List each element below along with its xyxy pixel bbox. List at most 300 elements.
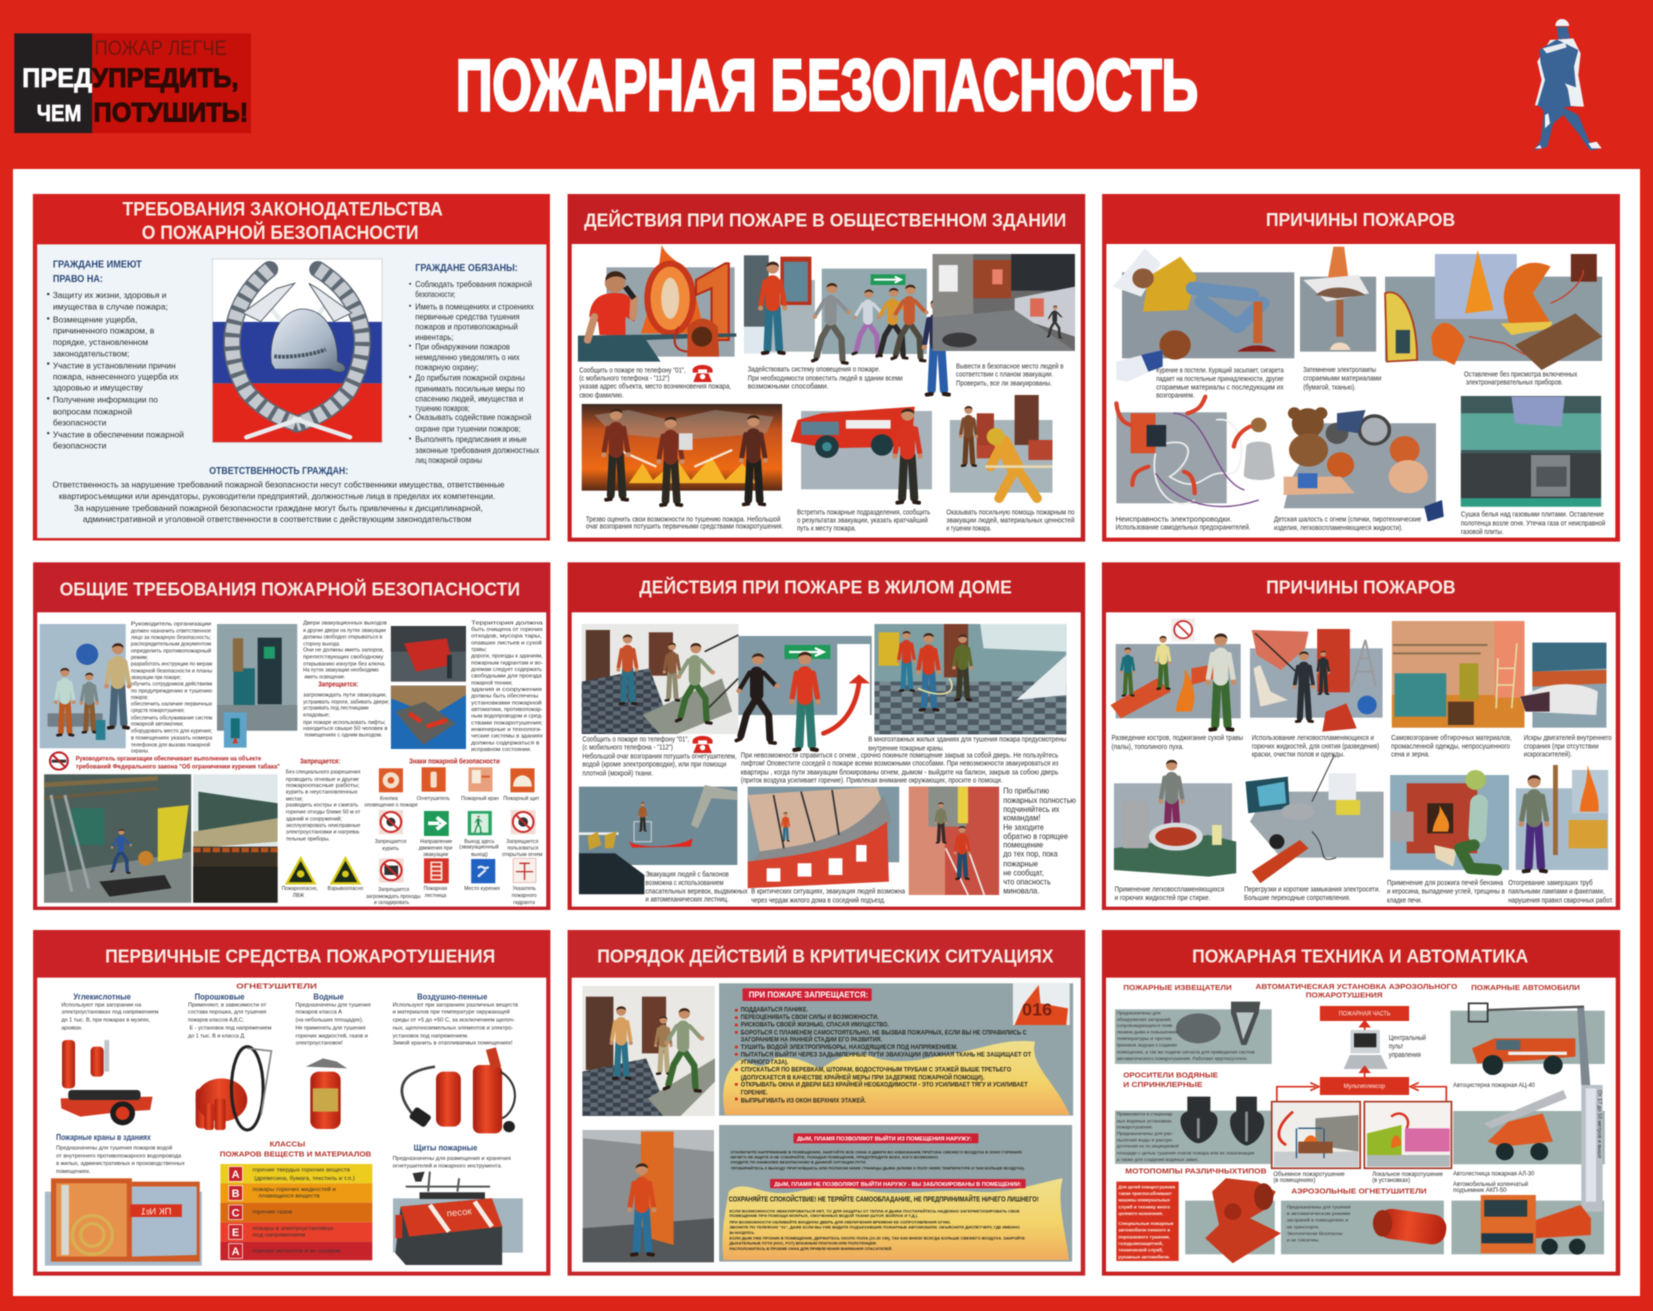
fire classes table: плавящихся веществ [259, 1194, 320, 1200]
rights heading [53, 260, 142, 285]
panel body [572, 978, 1081, 1272]
motor pump text box: газодымозащитной, [1118, 1240, 1163, 1247]
text column: пожароопасные работы; [286, 783, 360, 789]
caption: нарушения правил сварочных работ. [1508, 896, 1613, 904]
rights list: порядке, установленном [53, 337, 148, 347]
caption: Сообщить о пожаре по телефону "01", [582, 736, 689, 744]
fire classes table: Е [232, 1227, 239, 1239]
rights list [47, 290, 184, 450]
sign captions: Пожарный щит [503, 795, 540, 802]
sign captions: оповещения о пожаре [364, 803, 418, 809]
vehicle captions [1453, 1082, 1535, 1194]
caption: Проверить, все ли эвакуированы. [956, 379, 1052, 387]
illustration: washing with fuel [1114, 760, 1236, 877]
instructions: blocked in room: ЗВОНИТЕ ПО ТЕЛЕФОНУ "01", ДАЖЕ ЕСЛИ ВЫ УЖЕ ВИДИТЕ ПОДЪЕХАВШИЕ ПОЖАРНЫЕ АВТОМОБИЛИ. ОБЪЯСНИТЕ ДИСПЕТЧЕРУ, ГДЕ ИМЕННО [729, 1225, 1020, 1229]
caption: паяльными лампами и факелами, [1508, 887, 1605, 895]
sprinklers block [1115, 1097, 1272, 1164]
text column: курить в неустановленных [286, 790, 358, 796]
text column: пожарным гидрантам и во- [471, 660, 543, 666]
forbidden list: (ДОПУСКАЕТСЯ В КАЧЕСТВЕ КРАЙНЕЙ МЕРЫ ПРИ ЗАДЕРЖКЕ ПОЖАРНОЙ ПОМОЩИ). [741, 1072, 984, 1081]
responsibility text: квартиросъемщики или арендаторы, руководители предприятий, должностные лица в пределах их компетенции. [59, 491, 495, 501]
forbidden list: ОТКРЫВАТЬ ОКНА И ДВЕРИ БЕЗ КРАЙНЕЙ НЕОБХОДИМОСТИ - ЭТО УСИЛИВАЕТ ТЯГУ И УСИЛИВАЕТ [741, 1080, 1028, 1089]
caption [1508, 879, 1613, 904]
sprinklers text: ных водяных установках [1117, 1119, 1172, 1124]
detectors text: обнаружения загораний, [1117, 1016, 1172, 1023]
caption: Применение для розжига печей бензина [1387, 879, 1503, 887]
caption: о результатах эвакуации, указать кратчайший [797, 517, 928, 525]
panel body [1106, 244, 1615, 538]
duties list: инвентарь; [415, 332, 454, 342]
sign captions: гидранта [513, 900, 536, 906]
subheading: extinguishers: ОГНЕТУШИТЕЛИ [236, 982, 317, 990]
advisory text: что опасность [1003, 878, 1051, 887]
sign captions: открытым огнем [502, 852, 542, 858]
panel frame [33, 562, 550, 910]
advisory text: пожарные [1003, 860, 1038, 869]
photo: blocked exit [217, 624, 297, 748]
text column [131, 622, 213, 755]
text: CO2 [61, 1002, 158, 1032]
sprinklers text: Предназначены для рас- [1117, 1131, 1174, 1137]
rights list: пожара, нанесенного ущерба их [53, 372, 179, 382]
text column: здания и сооружения [471, 687, 542, 693]
sign captions: Пожарная [424, 886, 447, 892]
illustration: balcony rescue [579, 785, 737, 894]
section headings: ОРОСИТЕЛИ ВОДЯНЫЕ [1123, 1072, 1218, 1080]
illustration: fire truck meeting [791, 407, 932, 503]
fire shield with sand box: песок [446, 1206, 473, 1220]
text column: Руководитель организации [131, 622, 211, 628]
heading: ПРИЧИНЫ ПОЖАРОВ [1266, 578, 1456, 598]
caption: Небольшой очаг возгорания потушить огнетушителем, [582, 752, 737, 760]
text column: установками пожарной [471, 699, 542, 706]
aerosol text: Предназначены для тушения [1287, 1204, 1351, 1210]
forbidden list: РИСКОВАТЬ СВОЕЙ ЖИЗНЬЮ, СПАСАЯ ИМУЩЕСТВО. [741, 1019, 889, 1028]
caption: и автомеханических лестниц. [645, 896, 729, 904]
caption: через чердак жилого дома в соседний подъезд. [751, 897, 885, 905]
aerosol text: загораний в помещениях и [1287, 1217, 1348, 1224]
duties heading: ГРАЖДАНЕ ОБЯЗАНЫ: [415, 263, 518, 274]
caption: горючих жидкостей, для снятия (разведения) [1252, 742, 1379, 750]
motor pump text box: автомобили пенного и [1118, 1227, 1170, 1234]
text column: зданий и сооружений; [286, 815, 342, 822]
detectors text: признаков, ведущих к созданию [1117, 1044, 1177, 1049]
text column: лицо за пожарную безопасность; [131, 635, 211, 641]
captions: Локальное пожаротушение [1372, 1171, 1443, 1178]
duties list: Соблюдать требования пожарной [415, 279, 532, 289]
panel frame [568, 194, 1085, 542]
sign captions: Указатель [512, 886, 536, 892]
sign captions: Место курения [464, 886, 500, 892]
text: water: (на небольших площадях). [296, 1018, 364, 1024]
rights list: Возмещение ущерба, [53, 315, 137, 325]
text column: устраивать под лестницами [303, 706, 369, 712]
caption: сена и зерна. [1391, 751, 1430, 759]
sign captions: пользоваться [507, 846, 538, 852]
illustration: closing door [736, 636, 872, 750]
fire classes heading: ПОЖАРОВ ВЕЩЕСТВ И МАТЕРИАЛОВ [220, 1151, 371, 1159]
duties list: безопасности; [415, 289, 455, 299]
caption: Трезво оценить свои возможности по тушению пожара. Небольшой [586, 515, 780, 523]
caption: В критических ситуациях, эвакуация людей возможна [751, 887, 905, 895]
illustration: corridor plan [933, 254, 1075, 351]
rights list: безопасности [53, 441, 107, 450]
sign captions: лестница [425, 893, 447, 899]
text column: находиться свыше 50 человек в [303, 726, 387, 732]
sign captions: пожарного [512, 893, 537, 899]
forbidden list: СПУСКАТЬСЯ ПО ВЕРЕВКАМ, ШТОРАМ, ВОДОСТОЧНЫМ ТРУБАМ С ЭТАЖЕЙ ВЫШЕ ТРЕТЬЕГО [741, 1065, 1011, 1074]
text column: эксплуатировать неисправные [286, 823, 360, 829]
duties list: До прибытия пожарной охраны [415, 373, 525, 383]
fire station box: ПОЖАРНАЯ ЧАСТЬ [1339, 1011, 1391, 1018]
text column: в помещениях указать номера [131, 735, 213, 741]
text column: по предупреждению и тушению [131, 688, 213, 694]
caption: Искры двигателей внутреннего [1524, 734, 1612, 742]
advisory text: до тех пор, пока [1003, 850, 1058, 859]
caption: Сообщить о пожаре по телефону "01", [579, 367, 686, 375]
text: foam: Используют при загораниях различных веществ [393, 1002, 518, 1008]
illustration: volumetric extinguishing [1272, 1102, 1360, 1168]
icon: no smoking [50, 752, 68, 770]
aerosol text: на транспорте. [1287, 1225, 1320, 1230]
duties list: лиц пожарной охраны [415, 455, 482, 465]
caption: Применение легковоспламеняющихся [1115, 886, 1224, 894]
caption: (с мобильного телефона - "112") [579, 375, 670, 383]
fire classes table: В [232, 1188, 240, 1200]
sign captions: выход) [471, 852, 488, 858]
text column: разводить костры и сжигать [286, 803, 358, 809]
illustration: lamp [1300, 247, 1376, 352]
panel: general requirements [33, 562, 550, 910]
text: foam: и материалов при температуре окружающей [393, 1009, 510, 1016]
caption: сгораемыми материалами [1303, 374, 1381, 382]
multiplexer box [1320, 1077, 1409, 1095]
tobacco law note: Руководитель организации обеспечивает выполнение на объекте [76, 755, 261, 763]
text column: эвакуации при пожаре; [131, 675, 182, 681]
text column: определить противопожарный [131, 647, 211, 654]
aerosol text: Экологически безопасны [1287, 1231, 1343, 1237]
icon: arrow up [1360, 1021, 1369, 1030]
responsibility text [52, 480, 505, 524]
caption [748, 365, 903, 390]
extinguisher type headings: Воздушно-пенные [417, 993, 488, 1002]
text column: электроустановки и нагрева- [286, 830, 360, 836]
text: water: пожаров класса А [296, 1010, 342, 1016]
hydrants text: помещениях. [56, 1169, 91, 1175]
text column: загромождать пути эвакуации, [303, 693, 387, 699]
caption: (бумагой, тканью). [1303, 383, 1356, 391]
aerosol text: и не токсичны. [1287, 1239, 1320, 1244]
panel body [572, 244, 1081, 538]
caption: Отогревание замерзших труб [1508, 879, 1593, 887]
caption: Детская шалость с огнем (спички, пиротехнические [1274, 515, 1421, 524]
sign captions: Запрещается [378, 887, 409, 893]
vehicle captions: Автомобильный коленчатый [1453, 1181, 1528, 1188]
instructions: way out is possible: НИЧЕГО НЕ ИЩИТЕ И НЕ СОБИРАЙТЕ; ПОКИДАЯ ПОМЕЩЕНИЕ, ПРЕДУПРЕДИТЕ ВСЕХ, КОГО ВОЗМОЖНО. [730, 1155, 939, 1159]
panel frame [568, 930, 1085, 1276]
instructions: blocked in room: ЕСЛИ ДЫМ УЖЕ ПРОНИК В ПОМЕЩЕНИЕ, ДЕРЖИТЕСЬ ОКОЛО ПОЛА (10-20 СМ), ТАК КАК ВНИЗУ ВСЕГДА БОЛЬШЕ СВЕЖЕГО ВОЗДУХА. ЗАКРОЙТЕ [729, 1236, 1025, 1240]
section headings: ПОЖАРОТУШЕНИЯ [1306, 992, 1383, 1000]
illustration: thawing pipes [1516, 765, 1608, 871]
sign captions: Кнопка [380, 796, 399, 802]
fire classes table: (древесина, бумага, текстиль и т.п.) [254, 1176, 355, 1182]
text column: доемам следует содержать [471, 667, 542, 673]
panel: actions in a public building [568, 194, 1085, 542]
text column: На путях эвакуации необходимо [303, 668, 379, 674]
panel body [1106, 612, 1616, 907]
hydrants text: от внутреннего противопожарного водопровода [56, 1154, 182, 1160]
text column: обеспечить наличие первичных [131, 701, 212, 707]
forbidden list: ПОДДАВАТЬСЯ ПАНИКЕ. [741, 1007, 808, 1014]
illustration: local extinguishing [1364, 1102, 1451, 1168]
caption: возможна с использованием [645, 879, 724, 887]
text column: проводить огневые и другие [286, 777, 359, 783]
rights list: Защиту их жизни, здоровья и [53, 290, 167, 300]
responsibility text: За нарушение требований пожарной безопасности граждане могут быть привлечены к дисциплинарной, [74, 503, 483, 513]
fire classes table: пожары в электроустановках [252, 1226, 334, 1232]
forbidden list [735, 1007, 1032, 1104]
caption [579, 367, 731, 399]
text column: кладовые; [303, 712, 330, 718]
motor pump text box: служб и технику иного [1118, 1203, 1170, 1210]
text column: быть очищена от горючих [471, 627, 543, 633]
text column: местах; [286, 797, 303, 803]
sprinklers text: Применяются в стационар- [1117, 1112, 1174, 1118]
illustration: hallway escape [582, 624, 738, 734]
text: water: электроустановок! [296, 1040, 343, 1046]
caption [1387, 879, 1505, 904]
illustration: garage room [1392, 621, 1524, 728]
caption: сгорания (при отсутствии [1524, 742, 1599, 750]
caption: Перегрузки и короткие замыкания электросети. [1244, 886, 1380, 894]
heading: ДЕЙСТВИЯ ПРИ ПОЖАРЕ В ОБЩЕСТВЕННОМ ЗДАНИИ [584, 210, 1066, 232]
detectors text: лением дыма и повышением [1117, 1030, 1178, 1035]
caption: падает на постельные принадлежности, другие [1156, 374, 1284, 383]
caption: Курение в постели. Курящий засыпает, сигарета [1156, 366, 1284, 375]
duties list [409, 279, 540, 465]
caption [1524, 734, 1612, 759]
duties list: охране при тушении пожаров; [415, 423, 521, 433]
illustration: assessing the fire [582, 404, 782, 505]
smoke instructions panel: ДЫМ, ПЛАМЯ ПОЗВОЛЯЮТ ВЫЙТИ ИЗ ПОМЕЩЕНИЯ НАРУЖУ: [797, 1134, 972, 1142]
caption [1116, 515, 1251, 531]
caption [1244, 886, 1380, 902]
panel body [37, 244, 546, 538]
icon: red telephone [693, 365, 713, 382]
text: powder: до 1 тыс. В и класса Д. [188, 1033, 246, 1039]
text column: распорядительным документом [131, 642, 211, 648]
text: foam: ных, щелочноземельных элементов и электро- [393, 1026, 513, 1032]
text column: опавших листьев и сухой [471, 639, 542, 646]
forbidden list: ВЫПРЫГИВАТЬ ИЗ ОКОН ВЕРХНИХ ЭТАЖЕЙ. [741, 1095, 866, 1104]
heading: ПРИЧИНЫ ПОЖАРОВ [1266, 211, 1455, 231]
caption: Эвакуация людей с балконов [645, 871, 729, 879]
sign captions: Пожароопасно, [282, 886, 318, 892]
advisory text: командам! [1003, 814, 1040, 823]
rights heading: ГРАЖДАНЕ ИМЕЮТ [53, 260, 142, 271]
caption [868, 736, 1066, 752]
tobacco law note [76, 755, 280, 770]
responsibility heading: ОТВЕТСТВЕННОСТЬ ГРАЖДАН: [209, 466, 348, 477]
motor pump text box: целевого назначения. [1118, 1212, 1163, 1217]
panel: causes of fires 2 [1102, 562, 1620, 910]
aerosol text [1287, 1204, 1351, 1244]
panel: causes of fires 1 [1102, 194, 1620, 542]
caption [1303, 365, 1381, 391]
illustration: evacuating people [813, 269, 953, 395]
caption: искрогасителей). [1524, 751, 1572, 759]
caption: внутренние пожарные краны. [868, 744, 944, 752]
caption [1464, 370, 1578, 387]
duties list: законные требования должностных [415, 445, 540, 455]
duties list: Выполнять предписания и иные [415, 434, 527, 444]
forbidden panel: 016 [1022, 1000, 1052, 1020]
panel frame [33, 194, 550, 541]
panel: legislation requirements [33, 194, 550, 541]
instructions: blocked in room: ПРИ ВОЗМОЖНОСТИ ОБЛИВАЙТЕ ВХОДНУЮ ДВЕРЬ ДЛЯ УВЕЛИЧЕНИЯ ВРЕМЕНИ ЕЕ СОПРОТИВЛЕНИЯ ОГНЮ. [729, 1220, 951, 1224]
text column: тельные приборы. [286, 837, 330, 843]
text column: разработать инструкции по мерам [131, 662, 212, 668]
forbidden panel: ПРИ ПОЖАРЕ ЗАПРЕЩАЕТСЯ: [749, 990, 868, 1000]
caption: (с мобильного телефона - "112") [582, 744, 673, 752]
duties list: Оказывать содействие пожарной [415, 412, 532, 422]
text column: Территория должна [471, 620, 544, 626]
illustration: firefighters [950, 395, 1052, 498]
caption: Разведение костров, поджигание сухой травы [1112, 734, 1243, 742]
illustration: painters [1250, 629, 1383, 732]
fire classes table: С [232, 1207, 240, 1219]
multiplexer box: Мультиплексор [1344, 1083, 1385, 1090]
photo: pit on blue [391, 686, 466, 749]
sign captions: Пожарный кран [461, 795, 499, 802]
control desk label: пульт [1389, 1042, 1404, 1050]
detectors text: Предназначены для [1117, 1010, 1161, 1016]
caption: Использование самодельных предохранителей. [1116, 523, 1251, 531]
water extinguisher [306, 1058, 347, 1129]
text: powder: Е - установок под напряжением [189, 1026, 271, 1032]
caption: соответствии с планом эвакуации. [956, 371, 1053, 379]
fire shields heading: Щиты пожарные [414, 1144, 478, 1153]
text column: должны свободно открываться в [303, 634, 382, 640]
fire shields text: огнетушителей и пожарного инструмента. [393, 1163, 503, 1170]
advisory text: пожарных полностью [1003, 796, 1076, 805]
section headings: ПОЖАРНЫЕ ИЗВЕЩАТЕЛИ [1123, 984, 1232, 992]
sprinklers text: доточения ее по защищаемой [1117, 1143, 1179, 1150]
caption: Задействовать систему оповещения о пожаре. [748, 365, 880, 373]
duties list: тушению пожаров; [415, 403, 470, 413]
sprinklers text: пожаротушения. [1117, 1125, 1153, 1130]
caption: эвакуации людей, материальных ценностей [946, 517, 1075, 525]
text column [303, 693, 390, 739]
advisory text: помещение [1003, 840, 1044, 849]
powder extinguishers [196, 1047, 271, 1130]
duties list: немедленно уведомлять о них [415, 352, 520, 362]
photo: burning door [583, 1130, 714, 1262]
caption [645, 871, 748, 904]
heading: ПЕРВИЧНЫЕ СРЕДСТВА ПОЖАРОТУШЕНИЯ [105, 947, 495, 967]
text column: горючие отходы ближе 50 м от [286, 810, 361, 816]
sign captions: ЛВЖ [293, 893, 305, 899]
motor pump text box: порошкового тушения, [1118, 1235, 1170, 1240]
control desk label [1389, 1034, 1426, 1059]
text column: свободными для проезда [471, 674, 543, 680]
slogan block [14, 33, 251, 133]
fire classes table: А [232, 1246, 240, 1258]
caption: и тушении пожара. [946, 525, 991, 533]
forbidden list: ПЫТАТЬСЯ ВЫЙТИ ЧЕРЕЗ ЗАДЫМЛЕННЫЕ ПУТИ ЭВАКУАЦИИ (ВЛАЖНАЯ ТКАНЬ НЕ ЗАЩИЩАЕТ ОТ [741, 1049, 1032, 1058]
caption: и горючих жидкостей при стирке. [1115, 894, 1210, 902]
illustration: faulty wiring [1116, 397, 1275, 506]
fire shields text [393, 1156, 511, 1170]
panel frame [1102, 930, 1620, 1276]
emblem on flag [212, 259, 382, 442]
CO2 extinguishers [61, 1040, 153, 1125]
sign captions: и складировать [374, 900, 409, 906]
illustration: calling 01 [578, 245, 736, 362]
text: powder [188, 1002, 271, 1039]
text column: исправном состоянии. [471, 747, 532, 753]
panel frame [568, 562, 1085, 910]
extinguisher type headings [73, 993, 488, 1002]
caption: краски, очистки полов и одежды. [1252, 751, 1345, 759]
caption [1274, 515, 1421, 532]
sign captions: курить [382, 846, 399, 852]
heading: ДЕЙСТВИЯ ПРИ ПОЖАРЕ В ЖИЛОМ ДОМЕ [639, 577, 1012, 598]
text column: при пожаре использовать лифты; [303, 720, 386, 726]
caption [1252, 734, 1379, 759]
motor pump text box [1116, 1182, 1179, 1261]
caption: квартиры , когда пути эвакуации блокированы огнем, дымом - выйдите на балкон, закрыв за собою дверь [741, 768, 1059, 776]
motor pump text box: технической служб, [1118, 1247, 1163, 1254]
forbidden list: ТУШИТЬ ВОДОЙ ЭЛЕКТРОПРИБОРЫ, НАХОДЯЩИЕСЯ ПОД НАПРЯЖЕНИЕМ. [741, 1042, 958, 1051]
caption: Оказывать посильную помощь пожарным по [946, 508, 1075, 516]
sign captions [282, 795, 542, 906]
photo: burning field [193, 774, 278, 903]
fire classes table: горение металлов и их сплавов [252, 1249, 340, 1255]
text column: должны содержаться в [471, 740, 539, 746]
text: CO2: до 1 тыс. В, при пожарах в музеях, [61, 1018, 151, 1024]
caption: изделия, легковоспламеняющиеся жидкости). [1274, 523, 1403, 532]
sign captions: эвакуации [423, 852, 448, 858]
fire classes table: под напряжением [252, 1233, 305, 1239]
illustration: attic evacuation [748, 787, 899, 888]
text column: инженерные и технологи- [471, 727, 542, 733]
duties list: При обнаружении пожаров [415, 341, 510, 351]
duties list: спасению людей, имущества и [415, 394, 523, 403]
panel body [1106, 978, 1616, 1272]
panel body [572, 612, 1081, 907]
sprinklers text [1117, 1112, 1255, 1163]
heading: ПОЖАРНАЯ ТЕХНИКА И АВТОМАТИКА [1192, 947, 1529, 967]
text: CO2: электроустановках под напряжением [61, 1010, 158, 1016]
tobacco law note: требований Федерального закона "Об ограничении курения табака" [76, 762, 280, 770]
text column: ческие системы в зданиях [471, 734, 543, 740]
text column [286, 770, 361, 843]
rights list: Получение информации по [53, 395, 158, 404]
text column: Двери эвакуационных выходов [303, 620, 387, 626]
instructions: blocked in room: РАСПОЛОЖИТЕСЬ В ПРОЕМЕ ОКНА ДЛЯ ПРИВЛЕЧЕНИЯ ВНИМАНИЯ СПАСАТЕЛЕЙ. [729, 1247, 892, 1251]
panel: fire equipment and automation [1102, 930, 1620, 1276]
text column: отходов, мусора тары, [471, 634, 542, 640]
fire classes table [220, 1164, 372, 1260]
caption: В многоэтажных жилых зданиях для тушения пожара предусмотрены [868, 736, 1066, 744]
illustration: smoking in bed [1113, 248, 1294, 382]
text column: обучить сотрудников действиям [131, 681, 212, 688]
text: water: Не применять для тушения [296, 1026, 365, 1032]
photo: smoking room [40, 624, 131, 748]
text column [303, 620, 387, 681]
sign captions: (эвакуационный [459, 844, 499, 851]
